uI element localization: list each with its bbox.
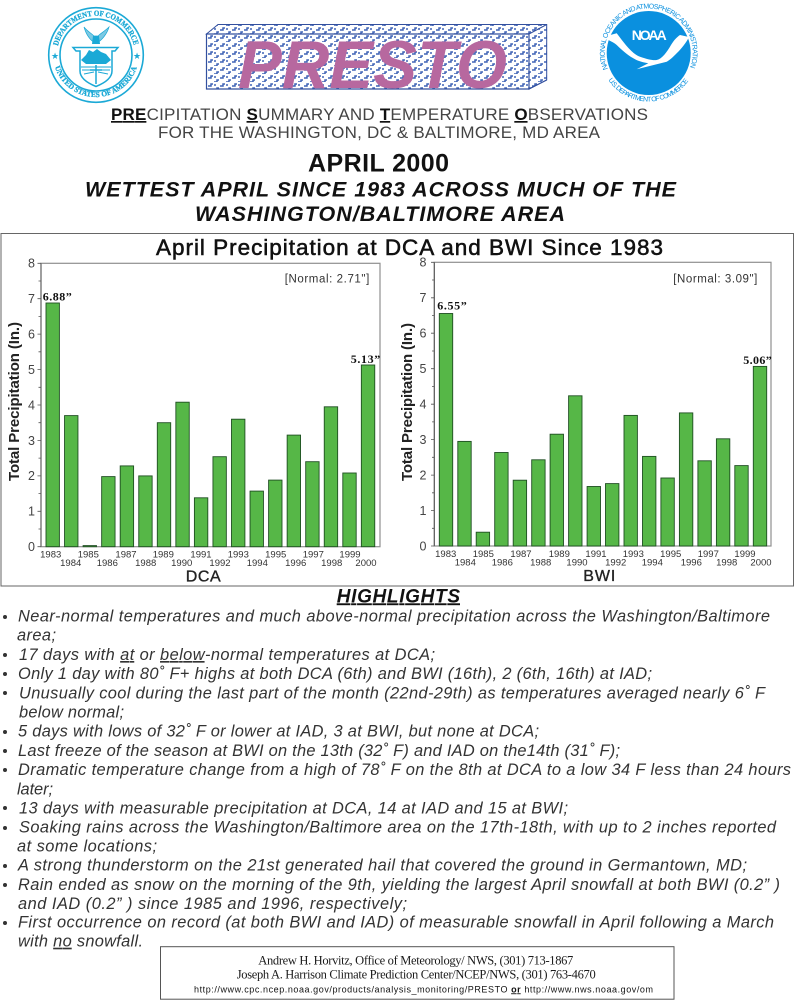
subtitle [111, 105, 648, 142]
bar chart: DCA: [Normal: 2.71"] [285, 274, 369, 286]
icon: Department of Commerce seal: ★ [133, 51, 141, 61]
bar chart: DCA: 1993 [228, 550, 249, 560]
bar chart: BWI [399, 256, 772, 585]
bar chart: DCA: 1999 [339, 550, 361, 560]
bar chart: BWI: 1986 [492, 558, 513, 568]
bar chart: DCA: 1997 [303, 550, 324, 560]
bar chart: BWI: 1998 [716, 558, 737, 568]
icon: Department of Commerce seal: DEPARTMENT OF COMMERCE [52, 10, 139, 46]
bar chart: DCA: 4 [28, 398, 35, 412]
icon: NOAA logo [600, 4, 698, 102]
panel: precipitation charts [1, 234, 794, 586]
text block: highlights list: Last freeze of the season at BWI on the 13th (32˚ F) and IAD on the14th (31˚ F); [18, 742, 620, 760]
credit box: Joseph A. Harrison Climate Prediction Center/NCEP/NWS, (301) 763-4670 [237, 967, 596, 981]
bar chart: DCA: 1983 [40, 550, 61, 560]
icon: Department of Commerce seal: UNITED STATES OF AMERICA [55, 65, 137, 98]
bar chart: DCA: 1986 [97, 558, 118, 569]
bar chart: DCA: 5.13” [351, 352, 380, 366]
bar chart: DCA: Total Precipitation (In.) [6, 322, 23, 481]
bar chart: BWI: 2 [420, 468, 427, 482]
text block: highlights list: and IAD (0.2” ) since 1985 and 1996, respectively; [18, 895, 407, 913]
bar chart: DCA: 1998 [321, 558, 342, 569]
bar chart: DCA: 8 [28, 256, 35, 270]
bar chart: DCA: 1985 [78, 550, 99, 560]
text block: highlights list: Unusually cool during the last part of the month (22nd-29th) as temperatures averaged nearly 6˚ F [19, 684, 766, 702]
bar chart: DCA: 1990 [171, 558, 192, 569]
text block: highlights list: First occurrence on record (at both BWI and IAD) of measurable snowfall in April following a March [18, 914, 774, 932]
bar chart: BWI: 1995 [660, 549, 681, 560]
bar chart: BWI: 5 [420, 362, 427, 376]
bar chart: DCA: 1989 [153, 550, 174, 560]
bar chart: DCA: 1994 [247, 558, 268, 569]
text block: highlights list: 17 days with at or below-normal temperatures at DCA; [19, 646, 435, 664]
bar chart: BWI: 1984 [455, 558, 476, 568]
bar chart: BWI: BWI [583, 568, 615, 585]
bar chart: DCA: 6.88” [43, 290, 72, 304]
bar chart: BWI: 1991 [585, 549, 607, 560]
bar chart: BWI: 1 [420, 504, 427, 518]
bar chart: DCA: 1996 [285, 558, 306, 569]
heading: wettest April [85, 178, 677, 226]
bar chart: BWI: 1988 [530, 558, 551, 568]
heading: month: APRIL 2000 [308, 150, 449, 178]
bar chart: DCA: 1 [28, 504, 35, 518]
bar chart: BWI: 7 [420, 291, 427, 305]
bar chart: DCA: 1984 [60, 558, 81, 569]
bar chart: DCA: 1988 [135, 558, 156, 569]
bar chart: DCA: 1987 [115, 550, 137, 560]
bar chart: DCA: 0 [28, 540, 35, 554]
icon: NOAA logo: NATIONAL OCEANIC AND ATMOSPHERIC ADMINISTRATION [600, 4, 698, 70]
heading: highlights: HIGHLIGHTS [337, 586, 460, 607]
icon: NOAA logo: NOAA [632, 27, 667, 43]
chart title: April Precipitation at DCA and BWI Since 1983 [156, 235, 663, 260]
bar chart: BWI: 6.55” [437, 299, 467, 313]
bar chart: BWI: 1999 [734, 549, 756, 560]
bar chart: DCA: 2 [28, 469, 35, 483]
text block: highlights list: with no snowfall. [18, 933, 143, 951]
bar chart: BWI: 1989 [549, 549, 570, 560]
bar chart: BWI: 1992 [605, 558, 626, 568]
text block: highlights list: Near-normal temperatures and much above-normal precipitation across the Washington/Baltimore [18, 608, 770, 626]
bar chart: BWI: 1983 [435, 549, 456, 560]
text block: highlights list: Only 1 day with 80˚ F+ highs at both DCA (6th) and BWI (16th), 2 (6th, 16th) at IAD; [18, 665, 652, 683]
bar chart: BWI: 8 [420, 256, 427, 270]
icon: NOAA logo: U.S. DEPARTMENT OF COMMERCE [609, 78, 688, 102]
text block: highlights list: 13 days with measurable precipitation at DCA, 14 at IAD and 15 at BWI; [19, 799, 568, 817]
bar chart: BWI: 1994 [642, 558, 663, 568]
bar chart: BWI: 1996 [681, 558, 702, 568]
text block: highlights list: 5 days with lows of 32˚ F or lower at IAD, 3 at BWI, but none at DCA; [18, 723, 539, 741]
text block: highlights list: Rain ended as snow on the morning of the 9th, yielding the largest April snowfall at both BWI (0.2” ) [18, 876, 780, 894]
bar chart: DCA: 5 [28, 363, 35, 377]
bar chart: DCA: 1995 [265, 550, 286, 560]
text block: highlights list [3, 608, 791, 951]
bar chart: BWI: 5.06” [743, 353, 772, 367]
text block: highlights list: Soaking rains across the Washington/Baltimore area on the 17th-18th, with up to 2 inches reported [19, 819, 777, 837]
heading: wettest April: WETTEST APRIL SINCE 1983 ACROSS MUCH OF THE [85, 178, 677, 202]
bar chart: BWI: [Normal: 3.09"] [673, 274, 757, 286]
bar chart: DCA: 3 [28, 434, 35, 448]
heading: wettest April: WASHINGTON/BALTIMORE AREA [195, 202, 565, 226]
bar chart: BWI: 2000 [750, 558, 772, 568]
credit box: Andrew H. Horvitz, Office of Meteorology/ NWS, (301) 713-1867 [258, 953, 573, 967]
text block: highlights list: at some locations; [17, 838, 157, 856]
bar chart: BWI: 1987 [510, 549, 532, 560]
text block: highlights list: A strong thunderstorm on the 21st generated hail that covered the ground in Germantown, MD; [17, 857, 747, 875]
logo: PRESTO block: PRESTO [238, 27, 507, 103]
bar chart: DCA: 7 [28, 292, 35, 306]
bar chart: DCA: 2000 [355, 558, 377, 569]
subtitle: FOR THE WASHINGTON, DC & BALTIMORE, MD AREA [158, 123, 601, 142]
bar chart: BWI: 3 [420, 433, 427, 447]
credit box [160, 947, 674, 999]
bar chart: DCA: 1992 [209, 558, 231, 569]
bar chart: DCA [6, 256, 380, 586]
icon: Department of Commerce seal: ★ [51, 51, 59, 61]
bar chart: BWI: 1993 [623, 549, 644, 560]
bar chart: BWI: 6 [420, 326, 427, 340]
credit box: http://www.cpc.ncep.noaa.gov/products/analysis_monitoring/PRESTO or http://www.nws.noaa.gov/om [194, 984, 653, 994]
bar chart: DCA: 6 [28, 328, 35, 342]
subtitle: PRECIPITATION SUMMARY AND TEMPERATURE OBSERVATIONS [111, 105, 648, 124]
text block: highlights list: Dramatic temperature change from a high of 78˚ F on the 8th at DCA to a low 34 F less than 24 hours [18, 761, 791, 779]
bar chart: BWI: 1997 [698, 549, 719, 560]
icon: Department of Commerce seal [48, 6, 144, 104]
bar chart: BWI: 1990 [566, 558, 588, 568]
bar chart: DCA: DCA [186, 569, 221, 586]
text block: highlights list: later; [17, 780, 53, 798]
text block: highlights list: below normal; [19, 703, 124, 721]
bar chart: DCA: 1991 [190, 550, 212, 560]
bar chart: BWI: 1985 [473, 549, 494, 560]
bar chart: BWI: 4 [420, 398, 427, 412]
text block: highlights list: area; [17, 627, 56, 645]
bar chart: BWI: Total Precipitation (In.) [399, 323, 416, 481]
bar chart: BWI: 0 [420, 540, 427, 554]
